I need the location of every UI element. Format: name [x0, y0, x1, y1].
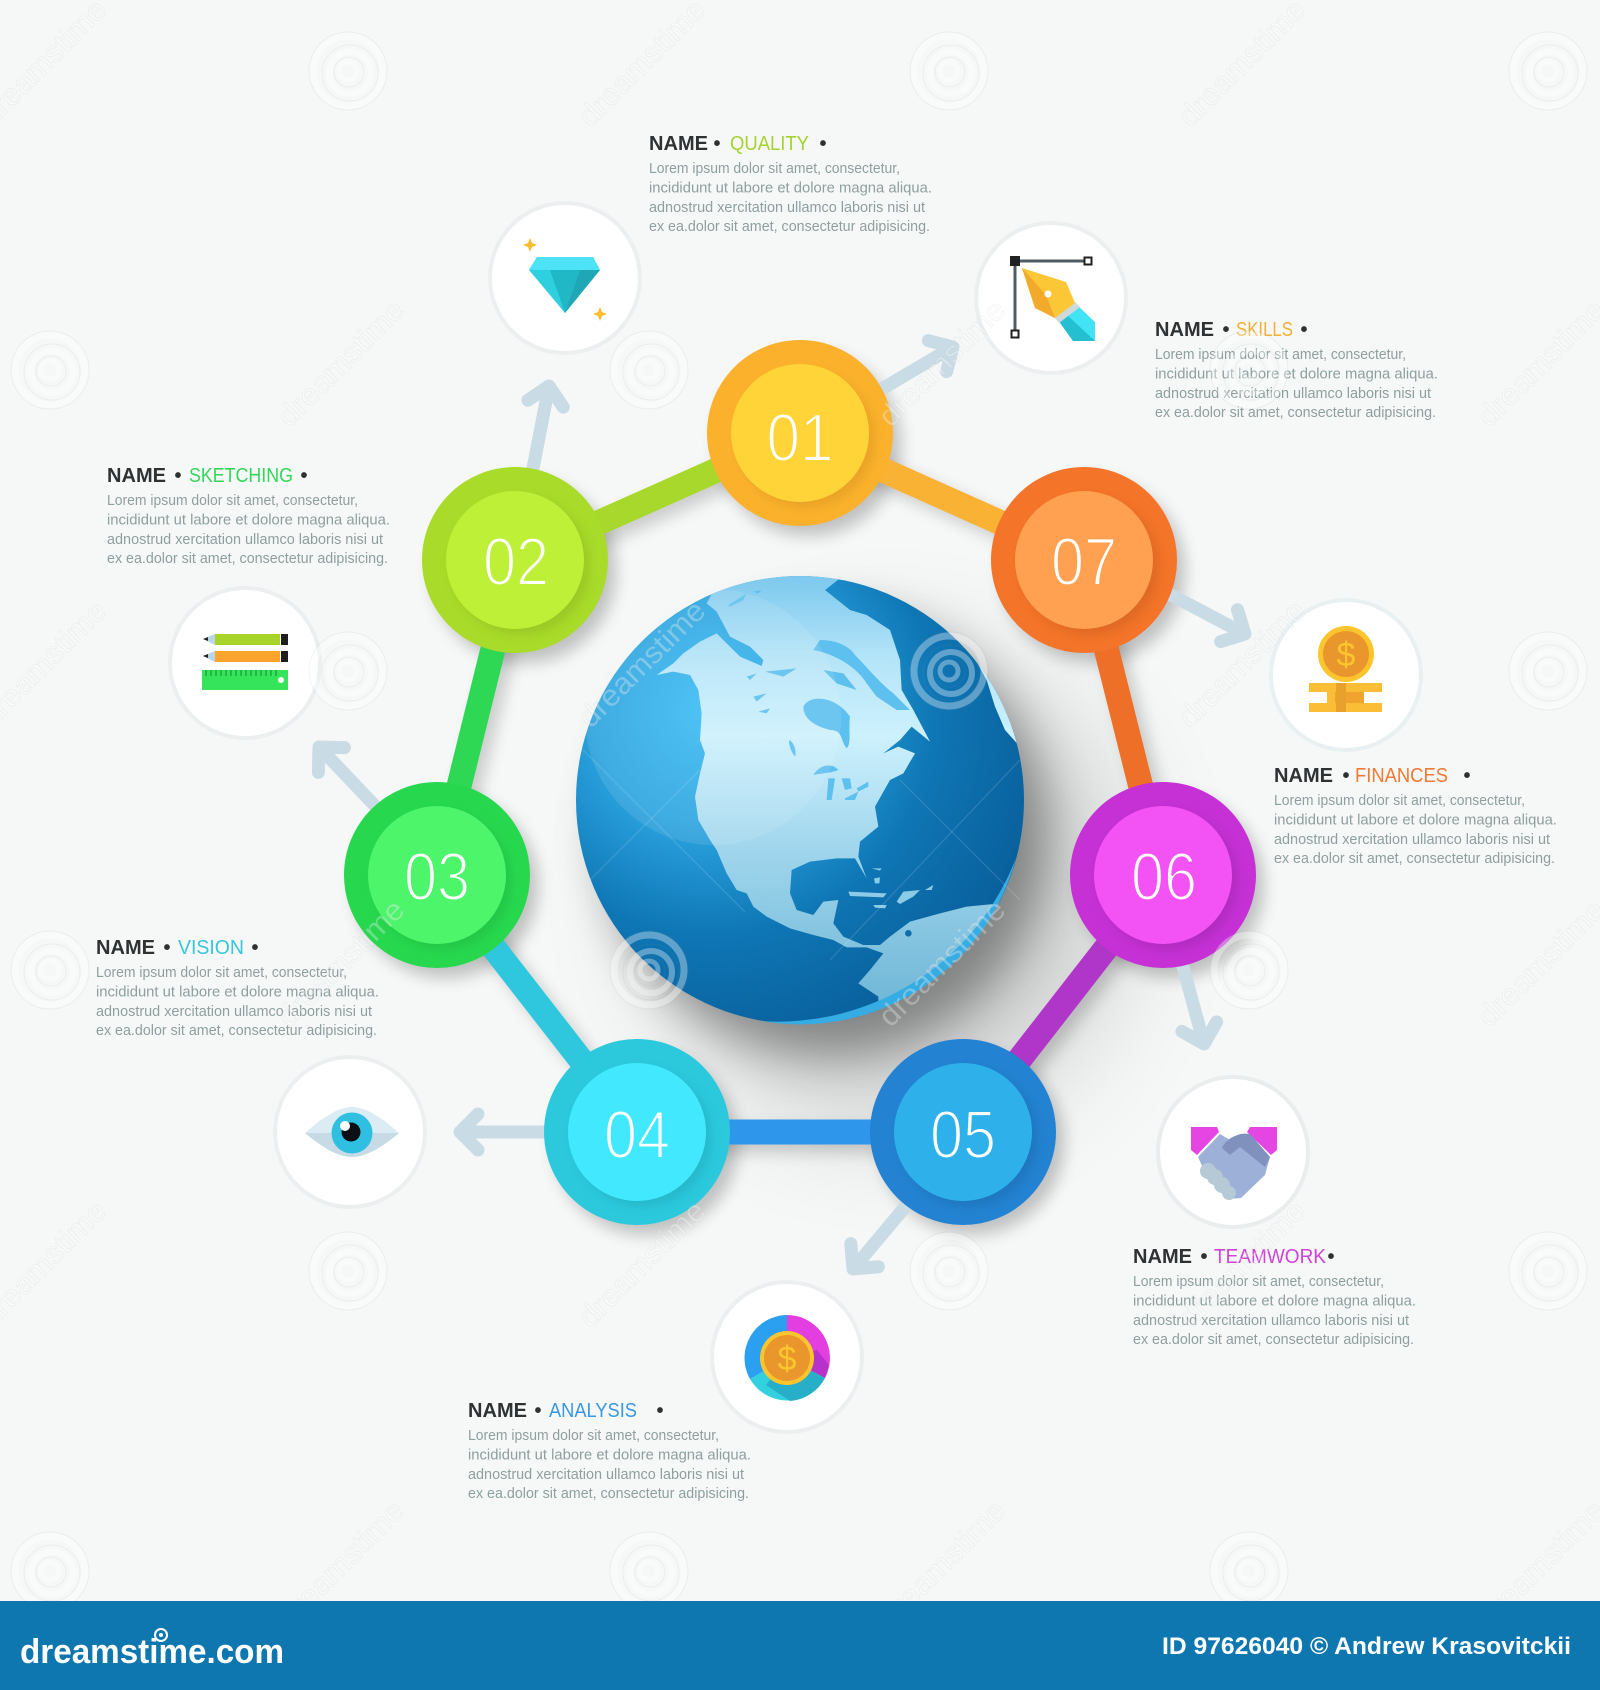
logo: dreamstime.com — [20, 1633, 284, 1671]
text block: quality: NAME — [649, 133, 708, 155]
text block: sketching: SKETCHING — [189, 465, 293, 487]
icon: diamond — [490, 203, 640, 353]
landmass: North America — [656, 576, 1016, 1008]
watermark text: dreamstime — [271, 893, 411, 1033]
icon: pen tool — [976, 223, 1126, 373]
icon: eye — [275, 1057, 425, 1207]
text block: teamwork — [1133, 1246, 1416, 1348]
text block: finances: • — [1463, 765, 1471, 787]
text block: teamwork: • — [1327, 1246, 1335, 1268]
watermark text: dreamstime — [1172, 594, 1312, 734]
text block: quality — [649, 133, 932, 235]
watermark text: dreamstime — [271, 293, 411, 433]
watermark text: dreamstime — [872, 293, 1012, 433]
text block: quality: incididunt ut labore et dolore magna aliqua. — [649, 180, 932, 196]
text block: teamwork: • — [1200, 1246, 1208, 1268]
text block: sketching: incididunt ut labore et dolore magna aliqua. — [107, 512, 390, 528]
text block: skills — [1155, 319, 1438, 421]
text block: skills: • — [1222, 319, 1230, 341]
text block: sketching: Lorem ipsum dolor sit amet, consectetur, — [107, 493, 358, 509]
drop shadows of globe and ring — [354, 352, 1264, 1235]
text block: teamwork: Lorem ipsum dolor sit amet, consectetur, — [1133, 1274, 1384, 1290]
text block: analysis — [468, 1400, 751, 1502]
text block: skills: NAME — [1155, 319, 1214, 341]
arrow: step 03 — [306, 735, 394, 825]
text block: analysis: ANALYSIS — [549, 1400, 637, 1422]
connector 07-01 — [800, 433, 1084, 560]
watermark text: dreamstime — [271, 1494, 411, 1634]
step 02 badge — [422, 467, 608, 653]
text block: teamwork: ex ea.dolor sit amet, consectetur adipisicing. — [1133, 1332, 1414, 1348]
step 05 badge: 05 — [930, 1097, 996, 1173]
connector 05-06 — [963, 875, 1163, 1132]
text block: sketching: adnostrud xercitation ullamco laboris nisi ut — [107, 532, 383, 548]
arrow: step 05 — [839, 1188, 925, 1281]
connector 03-04 — [437, 875, 637, 1132]
text block: analysis: Lorem ipsum dolor sit amet, consectetur, — [468, 1428, 719, 1444]
step 07 badge: 07 — [1051, 524, 1117, 600]
step 03 badge — [344, 782, 530, 968]
text block: teamwork: NAME — [1133, 1246, 1192, 1268]
connector 06-07 — [1084, 560, 1163, 875]
text block: finances: • — [1342, 765, 1350, 787]
step 04 badge — [544, 1039, 730, 1225]
rim crescent — [761, 858, 1016, 1024]
text block: finances: adnostrud xercitation ullamco laboris nisi ut — [1274, 832, 1550, 848]
step 05 badge — [870, 1039, 1056, 1225]
step 07 badge — [991, 467, 1177, 653]
icon: handshake — [1158, 1077, 1308, 1227]
icon: coins: $ — [1337, 636, 1356, 674]
text block: analysis: adnostrud xercitation ullamco laboris nisi ut — [468, 1467, 744, 1483]
text block: vision: VISION — [178, 937, 244, 959]
watermark text: dreamstime — [1172, 0, 1312, 133]
text block: quality: • — [713, 133, 721, 155]
text block: quality: QUALITY — [730, 133, 809, 155]
watermark text: dreamstime — [872, 1494, 1012, 1634]
text block: teamwork: adnostrud xercitation ullamco laboris nisi ut — [1133, 1313, 1409, 1329]
glass highlight — [585, 589, 841, 845]
connector ring — [437, 433, 1163, 1132]
arrow: step 02 — [514, 383, 567, 478]
arrow: step 04 — [460, 1114, 550, 1150]
watermark text: dreamstime — [572, 1194, 712, 1334]
text block: finances: NAME — [1274, 765, 1333, 787]
text block: sketching: ex ea.dolor sit amet, consectetur adipisicing. — [107, 551, 388, 567]
step 03 badge: 03 — [404, 839, 470, 915]
text block: analysis: ex ea.dolor sit amet, consectetur adipisicing. — [468, 1486, 749, 1502]
connector 04-05 — [637, 1120, 963, 1144]
step 06 badge: 06 — [1131, 839, 1197, 915]
text block: sketching: • — [300, 465, 308, 487]
text block: vision: incididunt ut labore et dolore magna aliqua. — [96, 984, 379, 1000]
step 04 badge: 04 — [604, 1097, 670, 1173]
text block: sketching — [107, 465, 390, 567]
arrow: step 06 — [1163, 952, 1221, 1049]
step 01 badge: 01 — [766, 400, 834, 476]
icon: pencils and ruler — [170, 588, 320, 738]
text block: analysis: incididunt ut labore et dolore magna aliqua. — [468, 1447, 751, 1463]
step 06 badge — [1070, 782, 1256, 968]
text block: skills: adnostrud xercitation ullamco laboris nisi ut — [1155, 386, 1431, 402]
text block: vision: ex ea.dolor sit amet, consectetur adipisicing. — [96, 1023, 377, 1039]
icon: pie chart with coin: $ — [778, 1340, 797, 1378]
text block: analysis: • — [656, 1400, 664, 1422]
icon: coins — [1271, 600, 1421, 750]
arrow: step 01 — [866, 331, 962, 408]
connector 02-03 — [437, 560, 515, 875]
text block: analysis: NAME — [468, 1400, 527, 1422]
text block: finances — [1274, 765, 1557, 867]
text block: sketching: NAME — [107, 465, 166, 487]
watermark text: dreamstime — [1172, 1194, 1312, 1334]
text block: quality: Lorem ipsum dolor sit amet, consectetur, — [649, 161, 900, 177]
text block: finances: ex ea.dolor sit amet, consectetur adipisicing. — [1274, 851, 1555, 867]
text block: vision: Lorem ipsum dolor sit amet, consectetur, — [96, 965, 347, 981]
text block: teamwork: TEAMWORK — [1214, 1246, 1327, 1268]
step 02 badge: 02 — [483, 524, 549, 600]
arrows pointing to icons — [306, 331, 1253, 1281]
icon: pie chart with coin — [712, 1282, 862, 1432]
text block: vision: • — [251, 937, 259, 959]
text block: sketching: • — [174, 465, 182, 487]
text block: finances: incididunt ut labore et dolore magna aliqua. — [1274, 812, 1557, 828]
text block: skills: Lorem ipsum dolor sit amet, consectetur, — [1155, 347, 1406, 363]
text block: skills: SKILLS — [1236, 319, 1293, 341]
globe — [576, 567, 1033, 1030]
text block: quality: adnostrud xercitation ullamco laboris nisi ut — [649, 200, 925, 216]
arrow: step 07 — [1157, 576, 1253, 650]
text block: skills: incididunt ut labore et dolore magna aliqua. — [1155, 366, 1438, 382]
text block: finances: Lorem ipsum dolor sit amet, consectetur, — [1274, 793, 1525, 809]
text block: teamwork: incididunt ut labore et dolore magna aliqua. — [1133, 1293, 1416, 1309]
text block: quality: • — [819, 133, 827, 155]
image credit: ID 97626040 © Andrew Krasovitckii — [1162, 1633, 1571, 1660]
text block: vision — [96, 937, 379, 1039]
islands — [848, 868, 933, 908]
footer banner — [0, 1601, 1600, 1690]
connector 01-02 — [515, 433, 800, 560]
text block: skills: ex ea.dolor sit amet, consectetur adipisicing. — [1155, 405, 1436, 421]
text block: finances: FINANCES — [1355, 765, 1448, 787]
watermark text: dreamstime — [572, 0, 712, 133]
step 01 badge — [707, 340, 893, 526]
text block: quality: ex ea.dolor sit amet, consectetur adipisicing. — [649, 219, 930, 235]
lakes and bays — [728, 590, 910, 800]
watermark text: dreamstime — [572, 594, 712, 734]
text block: skills: • — [1300, 319, 1308, 341]
text block: vision: adnostrud xercitation ullamco laboris nisi ut — [96, 1004, 372, 1020]
text block: vision: NAME — [96, 937, 155, 959]
watermark text: dreamstime — [872, 893, 1012, 1033]
text block: analysis: • — [534, 1400, 542, 1422]
text block: vision: • — [163, 937, 171, 959]
